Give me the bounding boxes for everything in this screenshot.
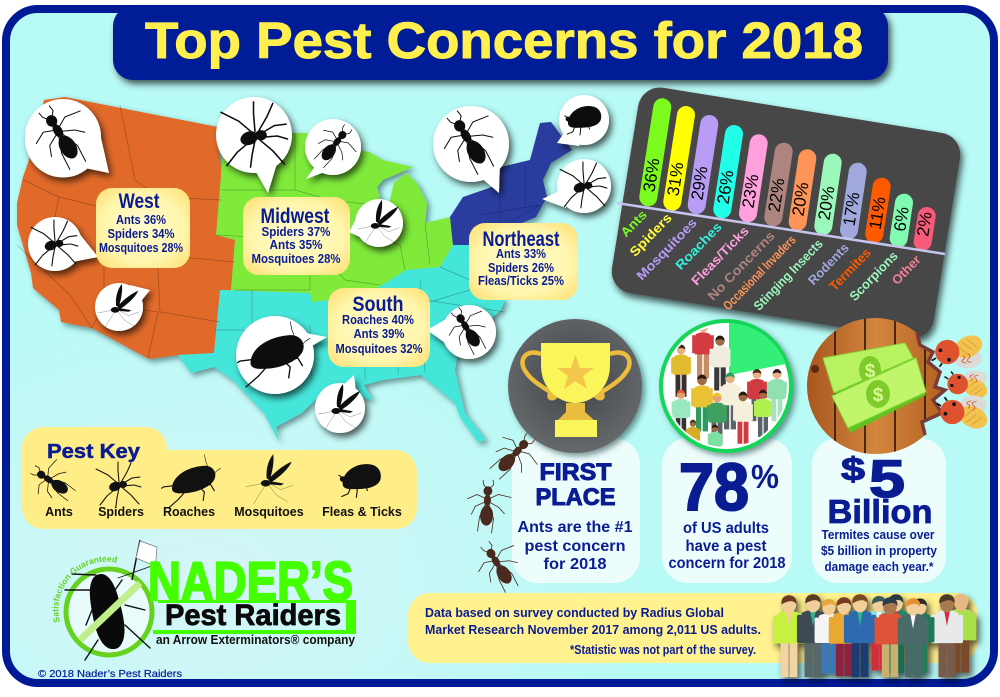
card: first place (512, 438, 640, 583)
logo wordmark: NADER’S (148, 550, 353, 612)
bubble: Northeast ant (431, 99, 512, 193)
key item: spiders (96, 462, 144, 519)
label: South: Mosquitoes 32% (336, 342, 422, 356)
key item: spiders: Spiders (98, 505, 144, 519)
title: Top Pest Concerns for 2018 (145, 12, 863, 69)
key item: fleas and ticks: Fleas & Ticks (322, 505, 402, 519)
percent values: 31% (664, 161, 688, 197)
money bills (823, 343, 926, 433)
logo emblem (52, 540, 160, 661)
money bills: $ (865, 361, 876, 382)
label: West: Spiders 34% (108, 227, 174, 241)
label: Northeast: Northeast (482, 228, 560, 251)
bubble: South ant (427, 298, 500, 361)
map of US regions (17, 97, 572, 442)
percent values: 2% (913, 211, 936, 238)
category labels: Occasional Invaders (720, 232, 799, 313)
edge bite (917, 333, 945, 435)
card: 78 percent: 78 (679, 450, 749, 525)
panel: survey note: Data based on survey conducted by Radius Global (425, 605, 724, 620)
card: 5 billion: $ (841, 451, 865, 487)
key item: roaches (162, 455, 221, 519)
label: Midwest (243, 197, 350, 275)
copyright: © 2018 Nader’s Pest Raiders (38, 668, 182, 680)
bar chart panel (608, 84, 964, 342)
label: Midwest: Ants 35% (270, 238, 322, 252)
category labels: Stinging Insects (750, 236, 826, 313)
key item: ants: Ants (45, 505, 73, 519)
card: 78 percent: % (751, 458, 779, 495)
pest key heading: Pest Key (47, 441, 141, 463)
percent values: 29% (688, 165, 712, 201)
card: 78 percent (662, 438, 792, 583)
region: South (178, 245, 505, 442)
logo subtitle box (153, 600, 356, 634)
panel: survey note (408, 593, 978, 663)
key item: roaches: Roaches (163, 505, 215, 519)
label: Northeast: Ants 33% (496, 247, 546, 261)
key item: mosquitoes: Mosquitoes (234, 505, 304, 519)
card: first place: for 2018 (544, 556, 607, 573)
category labels: Rodents (805, 240, 852, 288)
panel: pest key (14, 427, 417, 529)
label: Northeast (469, 223, 578, 300)
label: Northeast: Spiders 26% (488, 261, 554, 275)
illustration: group of people (773, 594, 976, 677)
percent values: 17% (840, 191, 864, 227)
card: first place: pest concern (524, 538, 626, 555)
card: 78 percent: have a pest (686, 538, 767, 555)
card: 5 billion: Termites cause over (822, 527, 934, 542)
card: 78 percent: of US adults (683, 520, 769, 537)
label: Northeast: Fleas/Ticks 25% (478, 274, 564, 288)
label: South: South (352, 293, 404, 316)
label: West: Ants 36% (116, 213, 166, 227)
category labels: No Concerns (704, 228, 778, 303)
logo emblem: Satisfaction Guaranteed (52, 556, 118, 622)
card: first place: Ants are the #1 (518, 519, 633, 536)
icon: wood and money with termites (807, 315, 991, 460)
logo (52, 540, 356, 661)
percent values: 20% (789, 181, 813, 217)
title banner (113, 6, 888, 80)
bars (648, 107, 927, 242)
card: first place: PLACE (536, 484, 616, 511)
label: South: Ants 39% (354, 327, 404, 341)
region: Midwest (216, 133, 453, 302)
percent values: 26% (714, 169, 738, 205)
category labels: Fleas/Ticks (688, 223, 752, 288)
region: West (17, 97, 235, 359)
logo: Pest Raiders (165, 599, 341, 632)
bubble: South roach (236, 316, 327, 394)
percent values: 20% (815, 185, 839, 221)
label: South: Roaches 40% (342, 313, 414, 327)
percent values: 6% (890, 206, 913, 233)
icon: crowd pie (661, 321, 791, 463)
panel: survey note: *Statistic was not part of the survey. (570, 643, 756, 657)
card: 78 percent: concern for 2018 (668, 555, 786, 572)
percent values: 23% (739, 173, 763, 209)
bubble: Northeast spider (542, 159, 611, 213)
bubble: South mosquito (315, 375, 365, 433)
key item: ants (14, 441, 93, 521)
region: Northeast (450, 122, 572, 245)
label: Midwest: Spiders 37% (262, 225, 330, 239)
bubble: Midwest mosquito (349, 199, 403, 247)
key item: mosquitoes (234, 454, 304, 519)
category labels: Other (889, 252, 924, 288)
label: West: Mosquitoes 28% (99, 241, 183, 255)
card: 5 billion: damage each year.* (824, 559, 934, 574)
bubble: Midwest ant (297, 109, 374, 184)
card: 5 billion: 5 (869, 450, 905, 509)
category labels: Scorpions (846, 248, 901, 304)
logo: an Arrow Exterminators® company (156, 633, 355, 647)
bubble: West spider (28, 217, 98, 271)
percent values: 36% (640, 157, 664, 193)
bubble: Midwest spider (216, 97, 292, 193)
key item: fleas and ticks (322, 464, 402, 519)
label: West (96, 188, 190, 268)
card: 5 billion: Billion (828, 493, 932, 530)
card: 5 billion (812, 438, 946, 583)
panel: survey note: Market Research November 2017 among 2,011 US adults. (425, 622, 761, 637)
label: West: West (118, 190, 160, 213)
brown ants (443, 417, 556, 600)
bubble: West mosquito (95, 283, 150, 331)
category labels: Termites (826, 245, 874, 294)
category labels: Ants (617, 207, 650, 240)
card: first place: FIRST (540, 459, 612, 486)
category labels: Roaches (672, 219, 725, 273)
state borders (17, 105, 540, 380)
label: Midwest: Mosquitoes 28% (252, 252, 340, 266)
category labels: Spiders (626, 210, 675, 259)
bubble: West ant (23, 94, 109, 178)
card: 5 billion: $5 billion in property (821, 543, 938, 558)
percent values: 22% (765, 177, 789, 213)
category labels: Mosquitoes (633, 215, 700, 283)
percent values: 11% (866, 195, 890, 231)
money bills: $ (873, 385, 884, 406)
label: Midwest: Midwest (260, 205, 330, 228)
termites (932, 331, 986, 368)
category labels (617, 207, 924, 313)
percent values (640, 157, 936, 238)
label: South (328, 288, 430, 367)
bubble: Northeast flea (557, 95, 609, 146)
icon: trophy (508, 319, 642, 453)
